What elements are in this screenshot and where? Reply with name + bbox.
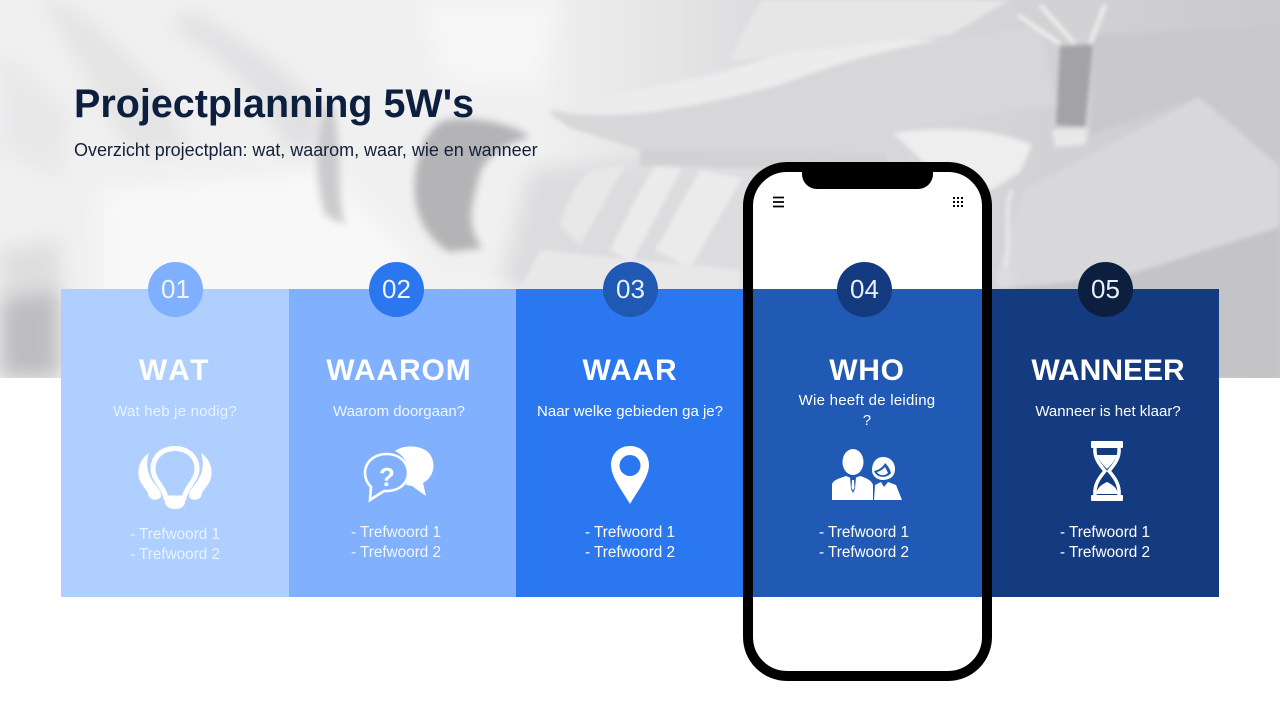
- background photo: hands on a table: [0, 0, 1280, 378]
- question waarom: Waarom doorgaan?: [333, 403, 465, 420]
- number 02: 02: [382, 274, 411, 304]
- icon: speech bubbles: [364, 446, 434, 502]
- keywords waar: - Trefwoord 1: [585, 524, 675, 541]
- number 03: [603, 262, 658, 317]
- fingers: [610, 165, 682, 262]
- arm and hand: [548, 25, 1056, 153]
- heading wanneer: WANNEER: [1031, 354, 1185, 387]
- panel: phone notch: [802, 170, 933, 189]
- panel: wat: [61, 289, 289, 597]
- icon: map pin: [611, 446, 649, 504]
- bracelet: [1005, 190, 1012, 268]
- keywords who: [819, 524, 909, 560]
- panel: waarom: [289, 289, 516, 597]
- number 05: [1078, 262, 1133, 317]
- keywords who: - Trefwoord 1: [819, 524, 909, 541]
- question who: Wie heeft de leiding: [799, 392, 935, 409]
- icon: hourglass: [1091, 441, 1123, 501]
- question waar: Naar welke gebieden ga je?: [537, 403, 723, 420]
- panel: who: [753, 289, 982, 597]
- keywords wanneer: - Trefwoord 1: [1060, 524, 1150, 541]
- keywords wat: - Trefwoord 2: [130, 546, 220, 562]
- number 01: 01: [161, 274, 190, 304]
- panel: waar: [516, 289, 743, 597]
- question who: [798, 392, 935, 428]
- keywords wat: - Trefwoord 1: [130, 526, 220, 543]
- paper sheet: [992, 97, 1280, 289]
- number 04: [837, 262, 892, 317]
- question wat: Wat heb je nodig?: [113, 403, 237, 420]
- number 02: [369, 262, 424, 317]
- icon: man and woman: [832, 449, 902, 500]
- white wrist patch: [893, 129, 1032, 190]
- watch strap: [1056, 43, 1093, 127]
- top-right dark: [1090, 25, 1280, 165]
- heading waarom: WAAROM: [326, 354, 472, 387]
- keywords waarom: - Trefwoord 2: [351, 544, 441, 560]
- heading waar: WAAR: [582, 354, 678, 387]
- number 05: 05: [1091, 274, 1120, 304]
- question wanneer: Wanneer is het klaar?: [1035, 403, 1181, 420]
- icon: menu: [773, 196, 784, 208]
- phone mockup: [743, 162, 992, 681]
- title: Projectplanning 5W's: [74, 82, 474, 126]
- icon: speech bubbles: ?: [379, 462, 395, 492]
- number 04: 04: [850, 274, 879, 304]
- heading who: WHO: [829, 354, 905, 387]
- number 03: 03: [616, 274, 645, 304]
- heading wat: WAT: [139, 354, 211, 387]
- keywords waar: [585, 524, 675, 560]
- number 01: [148, 262, 203, 317]
- subtitle: Overzicht projectplan: wat, waarom, waar, wie en wanneer: [74, 140, 538, 160]
- question who: ?: [863, 412, 871, 428]
- keywords wanneer: - Trefwoord 2: [1060, 544, 1150, 560]
- keywords waarom: - Trefwoord 1: [351, 524, 441, 541]
- crescent shadow: [414, 119, 530, 252]
- panel: wanneer: [992, 289, 1219, 597]
- keywords waar: - Trefwoord 2: [585, 544, 675, 560]
- icon: light bulb: [138, 446, 212, 509]
- keywords wat: [130, 526, 220, 562]
- icon: app grid: [953, 197, 963, 207]
- keywords who: - Trefwoord 2: [819, 544, 909, 560]
- keywords waarom: [351, 524, 441, 560]
- keywords wanneer: [1060, 524, 1150, 560]
